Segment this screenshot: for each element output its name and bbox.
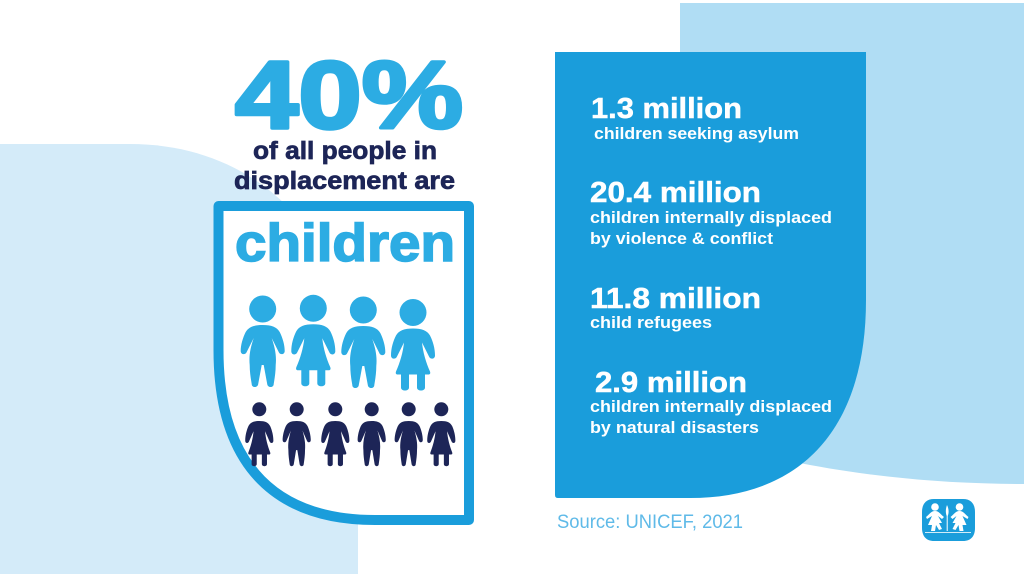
icons: small adults row bbox=[245, 402, 455, 466]
source: Source: UNICEF, 2021 bbox=[557, 512, 743, 533]
stat: 1.3 million: 1.3 million bbox=[591, 93, 742, 125]
subheading bbox=[234, 137, 455, 195]
subheading: displacement are bbox=[234, 167, 455, 195]
stat: 1.3 million: children seeking asylum bbox=[594, 124, 799, 143]
subheading: of all people in bbox=[253, 137, 437, 165]
logo bbox=[922, 499, 975, 541]
background shape: left bbox=[0, 144, 358, 574]
stat: 2.9 million: children internally displaced bbox=[590, 397, 832, 416]
stat: 20.4 million: children internally displaced bbox=[590, 208, 832, 227]
stat: 2.9 million bbox=[590, 367, 832, 437]
shield frame bbox=[218, 206, 469, 520]
stat: 20.4 million: 20.4 million bbox=[590, 177, 761, 209]
stat: 1.3 million bbox=[591, 93, 799, 143]
stat: 2.9 million: by natural disasters bbox=[590, 418, 759, 437]
headline: 40%: 40% bbox=[235, 42, 463, 149]
stat: 20.4 million bbox=[590, 177, 832, 248]
stat: 11.8 million: child refugees bbox=[590, 313, 712, 332]
panel: statistics bbox=[555, 52, 866, 498]
icons: large children row bbox=[241, 295, 435, 390]
word: children: children bbox=[235, 214, 455, 273]
stat: 11.8 million: 11.8 million bbox=[590, 283, 761, 315]
stat: 2.9 million: 2.9 million bbox=[595, 367, 747, 399]
stat: 20.4 million: by violence & conflict bbox=[590, 229, 773, 248]
stat: 11.8 million bbox=[590, 283, 761, 332]
background shape: right bbox=[680, 3, 1024, 484]
